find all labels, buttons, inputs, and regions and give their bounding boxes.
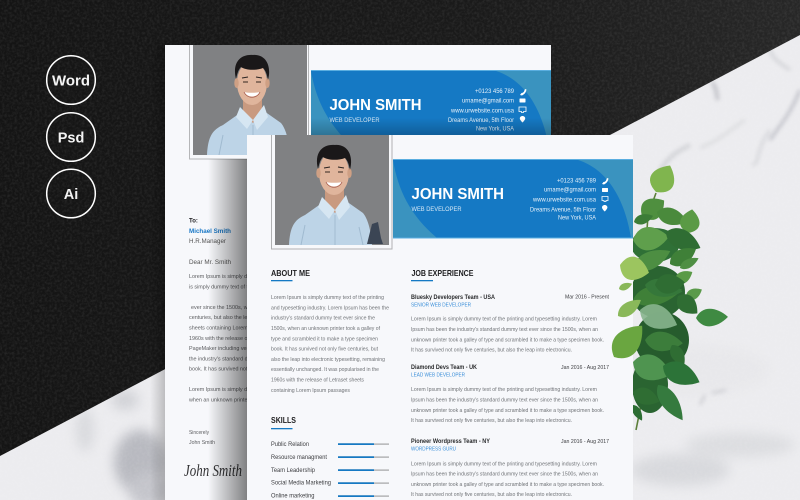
recipient: Michael Smith bbox=[189, 228, 231, 235]
about me text: book. It has survived not only five centuries, but bbox=[271, 346, 379, 352]
contact details: urname@gmail.com bbox=[544, 187, 596, 194]
contact details: Dreams Avenue, 5th Floor bbox=[530, 206, 596, 213]
letter body bbox=[188, 274, 306, 404]
name: JOHN SMITH bbox=[412, 186, 504, 203]
contact details: www.urwebsite.com.usa bbox=[532, 197, 597, 204]
about me text: type and scrambled it to make a type specimen bbox=[271, 336, 378, 342]
badge: Word: Word bbox=[52, 74, 90, 90]
job: pioneer wordpress: WORDPRESS GURU bbox=[411, 446, 456, 452]
job: diamond devs: unknown printer took a galley of type and scrambled it to make a type specimen book. bbox=[411, 408, 604, 414]
letter body: sheets containing Lorem Ipsum passages bbox=[189, 326, 289, 332]
job: pioneer wordpress: Lorem Ipsum is simply dummy text of the printing and typesetting industry. Lorem bbox=[411, 462, 598, 468]
job: pioneer wordpress: It has survived not only five centuries, but also the leap into electronicu. bbox=[411, 492, 572, 498]
contact details bbox=[530, 177, 597, 222]
badge: Word bbox=[47, 56, 95, 104]
job: bluesky developers: Bluesky Developers Team - USA bbox=[411, 295, 496, 301]
job: bluesky developers bbox=[411, 294, 609, 354]
heading: skills bbox=[271, 415, 296, 429]
job: bluesky developers: Ipsum has been the industry's standard dummy text ever since the 1500s, when an bbox=[411, 327, 598, 333]
letter body: book. It has survived not only five bbox=[189, 366, 269, 372]
about me text: Lorem Ipsum is simply dummy text of the printing bbox=[271, 295, 384, 301]
about me text: containing Lorem Ipsum passages bbox=[271, 388, 350, 394]
contact icons bbox=[602, 178, 608, 212]
skill: public relation: Public Relation bbox=[271, 442, 309, 448]
about me text: 1960s with the release of Letraset sheets bbox=[271, 378, 364, 384]
salutation: Dear Mr. Smith bbox=[189, 259, 232, 266]
plant stems and dark foliage mass behind page edge bbox=[629, 193, 689, 430]
sign-off bbox=[189, 430, 215, 446]
format badges bbox=[47, 56, 95, 218]
letter body: ever since the 1500s, when an unknown printer bbox=[191, 305, 304, 311]
back job title: WEB DEVELOPER bbox=[330, 117, 380, 124]
portrait photo bbox=[272, 135, 392, 249]
sign-off: John Smith bbox=[189, 440, 215, 446]
contact details: New York, USA bbox=[558, 215, 597, 222]
heading: about me: ABOUT ME bbox=[271, 268, 310, 278]
skill: resource management: Resource managment bbox=[271, 455, 327, 461]
signature: John Smith bbox=[184, 461, 242, 480]
job: pioneer wordpress: Ipsum has been the industry's standard dummy text ever since the 1500s, when an bbox=[411, 472, 598, 478]
back contact details: Dreams Avenue, 5th Floor bbox=[448, 117, 514, 124]
back contact icons bbox=[519, 89, 526, 122]
about me text: 1500s, when an unknown printer took a galley of bbox=[271, 326, 380, 332]
job title: WEB DEVELOPER bbox=[412, 206, 462, 213]
letter body: Lorem Ipsum is simply dummy text of the bbox=[189, 387, 287, 393]
skill: team leadership: Team Leadership bbox=[271, 468, 316, 474]
back contact details: www.urwebsite.com.usa bbox=[450, 108, 515, 114]
skill: social media marketing: Social Media Marketing bbox=[271, 480, 331, 486]
job: diamond devs: Lorem Ipsum is simply dummy text of the printing and typesetting industry. Lorem bbox=[411, 387, 598, 393]
badge: Psd: Psd bbox=[58, 130, 84, 146]
job: pioneer wordpress: Jan 2016 - Aug 2017 bbox=[561, 439, 609, 445]
about me text: essentially unchanged. It was popularised in the bbox=[271, 367, 379, 373]
job: pioneer wordpress: Pioneer Wordpress Team - NY bbox=[411, 439, 490, 445]
letter body: centuries, but also the leap into electronic bbox=[189, 315, 288, 321]
recipient: H.R.Manager bbox=[189, 239, 226, 245]
recipient bbox=[189, 218, 231, 245]
back page: cover letter bbox=[150, 45, 551, 500]
badge: Psd bbox=[47, 113, 95, 161]
back contact details: New York, USA bbox=[476, 126, 515, 132]
badge: Ai: Ai bbox=[64, 187, 78, 203]
letter body: is simply dummy text of the printing and type bbox=[189, 284, 295, 290]
letter body: when an unknown printer took a galley bbox=[188, 398, 281, 404]
about me text: also the leap into electronic typesetting, remaining bbox=[271, 357, 385, 363]
about me text: industry's standard dummy text ever since the bbox=[271, 316, 375, 322]
header band bbox=[393, 159, 633, 238]
sign-off: Sincerely bbox=[189, 430, 209, 436]
plant bbox=[605, 160, 728, 430]
job: diamond devs: Jan 2016 - Aug 2017 bbox=[561, 365, 609, 371]
about me text bbox=[271, 295, 389, 394]
letter body: Lorem Ipsum is simply dummy text of the printing bbox=[189, 274, 306, 280]
heading: about me bbox=[271, 268, 310, 281]
job: pioneer wordpress bbox=[411, 439, 609, 498]
job: diamond devs: Diamond Devs Team - UK bbox=[411, 365, 478, 371]
back contact details bbox=[448, 88, 515, 132]
back page header band bbox=[311, 70, 551, 149]
job: bluesky developers: unknown printer took a galley of type and scrambled it to make a type specimen book. bbox=[411, 337, 604, 343]
lower leaves bbox=[651, 273, 728, 425]
contact details: +0123 456 789 bbox=[557, 177, 597, 184]
badge: Ai bbox=[47, 169, 95, 218]
job: bluesky developers: It has survived not only five centuries, but also the leap into electronicu. bbox=[411, 348, 572, 354]
back name: JOHN SMITH bbox=[330, 97, 422, 114]
job: diamond devs: Ipsum has been the industry's standard dummy text ever since the 1500s, when an bbox=[411, 398, 598, 404]
upper leaves bbox=[632, 160, 705, 287]
back page letter text bbox=[184, 218, 306, 480]
heading: skills: SKILLS bbox=[271, 415, 296, 425]
job: diamond devs: LEAD WEB DEVELOPER bbox=[411, 372, 465, 378]
job: bluesky developers: SENIOR WEB DEVELOPER bbox=[411, 302, 471, 308]
job: pioneer wordpress: unknown printer took a galley of type and scrambled it to make a type specimen book. bbox=[411, 482, 604, 488]
letter body: the industry's standard dummy text ever bbox=[189, 356, 285, 362]
back contact details: urname@gmail.com bbox=[462, 98, 514, 104]
back contact details: +0123 456 789 bbox=[475, 88, 515, 95]
heading: job experience bbox=[411, 268, 474, 281]
light leaves crossing the page bbox=[605, 254, 652, 365]
heading: job experience: JOB EXPERIENCE bbox=[412, 268, 474, 278]
skill: online marketing: Online marketing bbox=[271, 494, 314, 500]
front page: resume bbox=[247, 135, 633, 500]
recipient: To: bbox=[189, 218, 198, 224]
job: diamond devs: It has survived not only five centuries, but also the leap into electronicu. bbox=[411, 418, 572, 424]
letter body: 1960s with the release of Letraset sheets bbox=[189, 336, 288, 342]
about me text: and typesetting industry. Lorem Ipsum has been the bbox=[271, 306, 389, 312]
back page photo bbox=[190, 45, 308, 159]
skills list bbox=[271, 442, 389, 500]
shadow cast by front page bbox=[208, 118, 551, 500]
job: diamond devs bbox=[411, 365, 609, 424]
job: bluesky developers: Lorem Ipsum is simply dummy text of the printing and typesetting industry. Lorem bbox=[411, 317, 598, 323]
letter body: PageMaker including versions of Lorem bbox=[189, 346, 284, 352]
job: bluesky developers: Mar 2016 - Present bbox=[565, 294, 609, 300]
